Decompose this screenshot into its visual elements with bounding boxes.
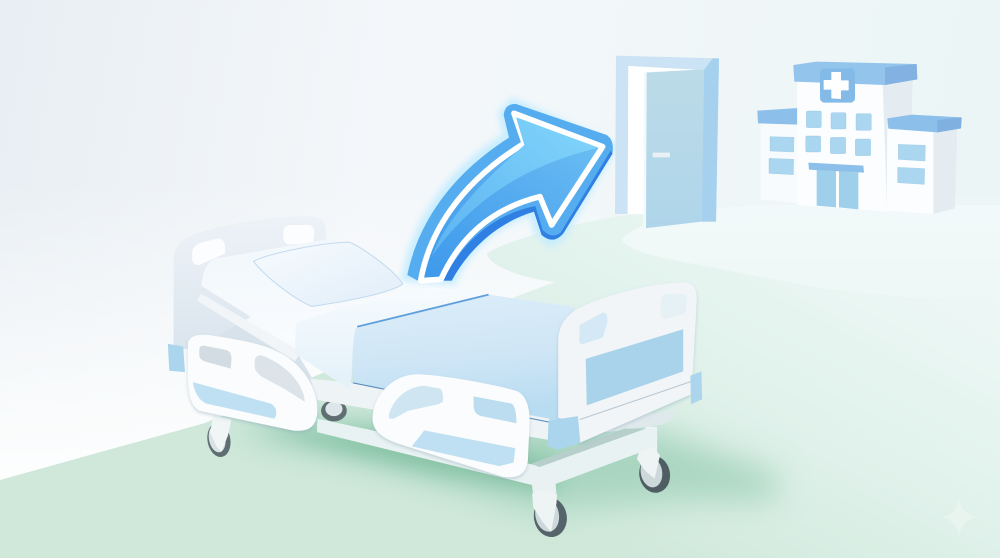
arrow lower dark edge: [443, 151, 613, 281]
sheet edge shadow: [357, 295, 489, 327]
core shadow: [250, 428, 560, 492]
foot frame underside: [599, 411, 674, 432]
headboard handles: [192, 225, 314, 265]
corner bumpers: [168, 344, 702, 450]
arrow white border and face: [421, 113, 603, 281]
footboard crease: [580, 381, 691, 420]
shadow under bed: [225, 420, 780, 510]
footboard: [558, 282, 697, 443]
lower frame shadow strip: [531, 429, 646, 467]
main block side: [883, 81, 913, 212]
floor: [0, 195, 1000, 558]
slanted backrest frame: [197, 294, 301, 361]
lower wall brightening: [0, 0, 600, 558]
front side rail: [372, 374, 530, 477]
arrow outer edge: [407, 104, 613, 282]
mattress: [352, 295, 574, 421]
left rail openings: [199, 346, 232, 369]
left rail panel: [193, 382, 276, 419]
main block: [797, 80, 887, 212]
main roof: [793, 62, 917, 85]
door frame right side: [702, 58, 719, 222]
hospital building: [757, 62, 962, 214]
arrow: [407, 103, 613, 282]
arrow glow: [407, 103, 612, 280]
mattress base frame: [310, 379, 549, 440]
pale floor patch behind door and hospital: [622, 205, 1000, 300]
right wing roof: [887, 115, 962, 132]
right wing: [887, 127, 934, 214]
left wing: [761, 122, 798, 203]
raised head section: [201, 239, 410, 345]
door handle: [653, 153, 670, 157]
mattress base line: [353, 383, 549, 422]
door opening light: [628, 66, 702, 214]
door edge: [643, 73, 647, 228]
front rail openings: [389, 386, 443, 419]
door panel: [644, 69, 704, 228]
broad shadow: [225, 420, 780, 510]
footboard blue panel: [586, 329, 683, 405]
left wing roof: [757, 108, 798, 125]
footboard handles: [579, 312, 607, 345]
front caster: [531, 491, 570, 540]
right caster: [636, 427, 673, 495]
white cross: [824, 72, 848, 99]
door frame: [615, 56, 719, 222]
hospital bed: [168, 216, 702, 540]
back caster: [321, 400, 347, 421]
hospital windows: [769, 111, 925, 184]
pillow: [254, 242, 403, 306]
front rail panel: [412, 430, 515, 466]
door: [615, 56, 719, 228]
lower frame post: [530, 466, 556, 495]
arrow highlight: [432, 117, 599, 257]
lower frame: [317, 419, 657, 486]
sparkle mark: [942, 499, 977, 535]
left side rail: [188, 335, 317, 431]
folded sheet: [295, 287, 489, 389]
head caster: [205, 415, 233, 459]
headboard: [174, 216, 326, 350]
bed body behind headboard rail: [185, 300, 319, 411]
hospital entrance: [808, 163, 864, 209]
right wing side: [933, 127, 957, 214]
cross badge: [820, 68, 855, 103]
